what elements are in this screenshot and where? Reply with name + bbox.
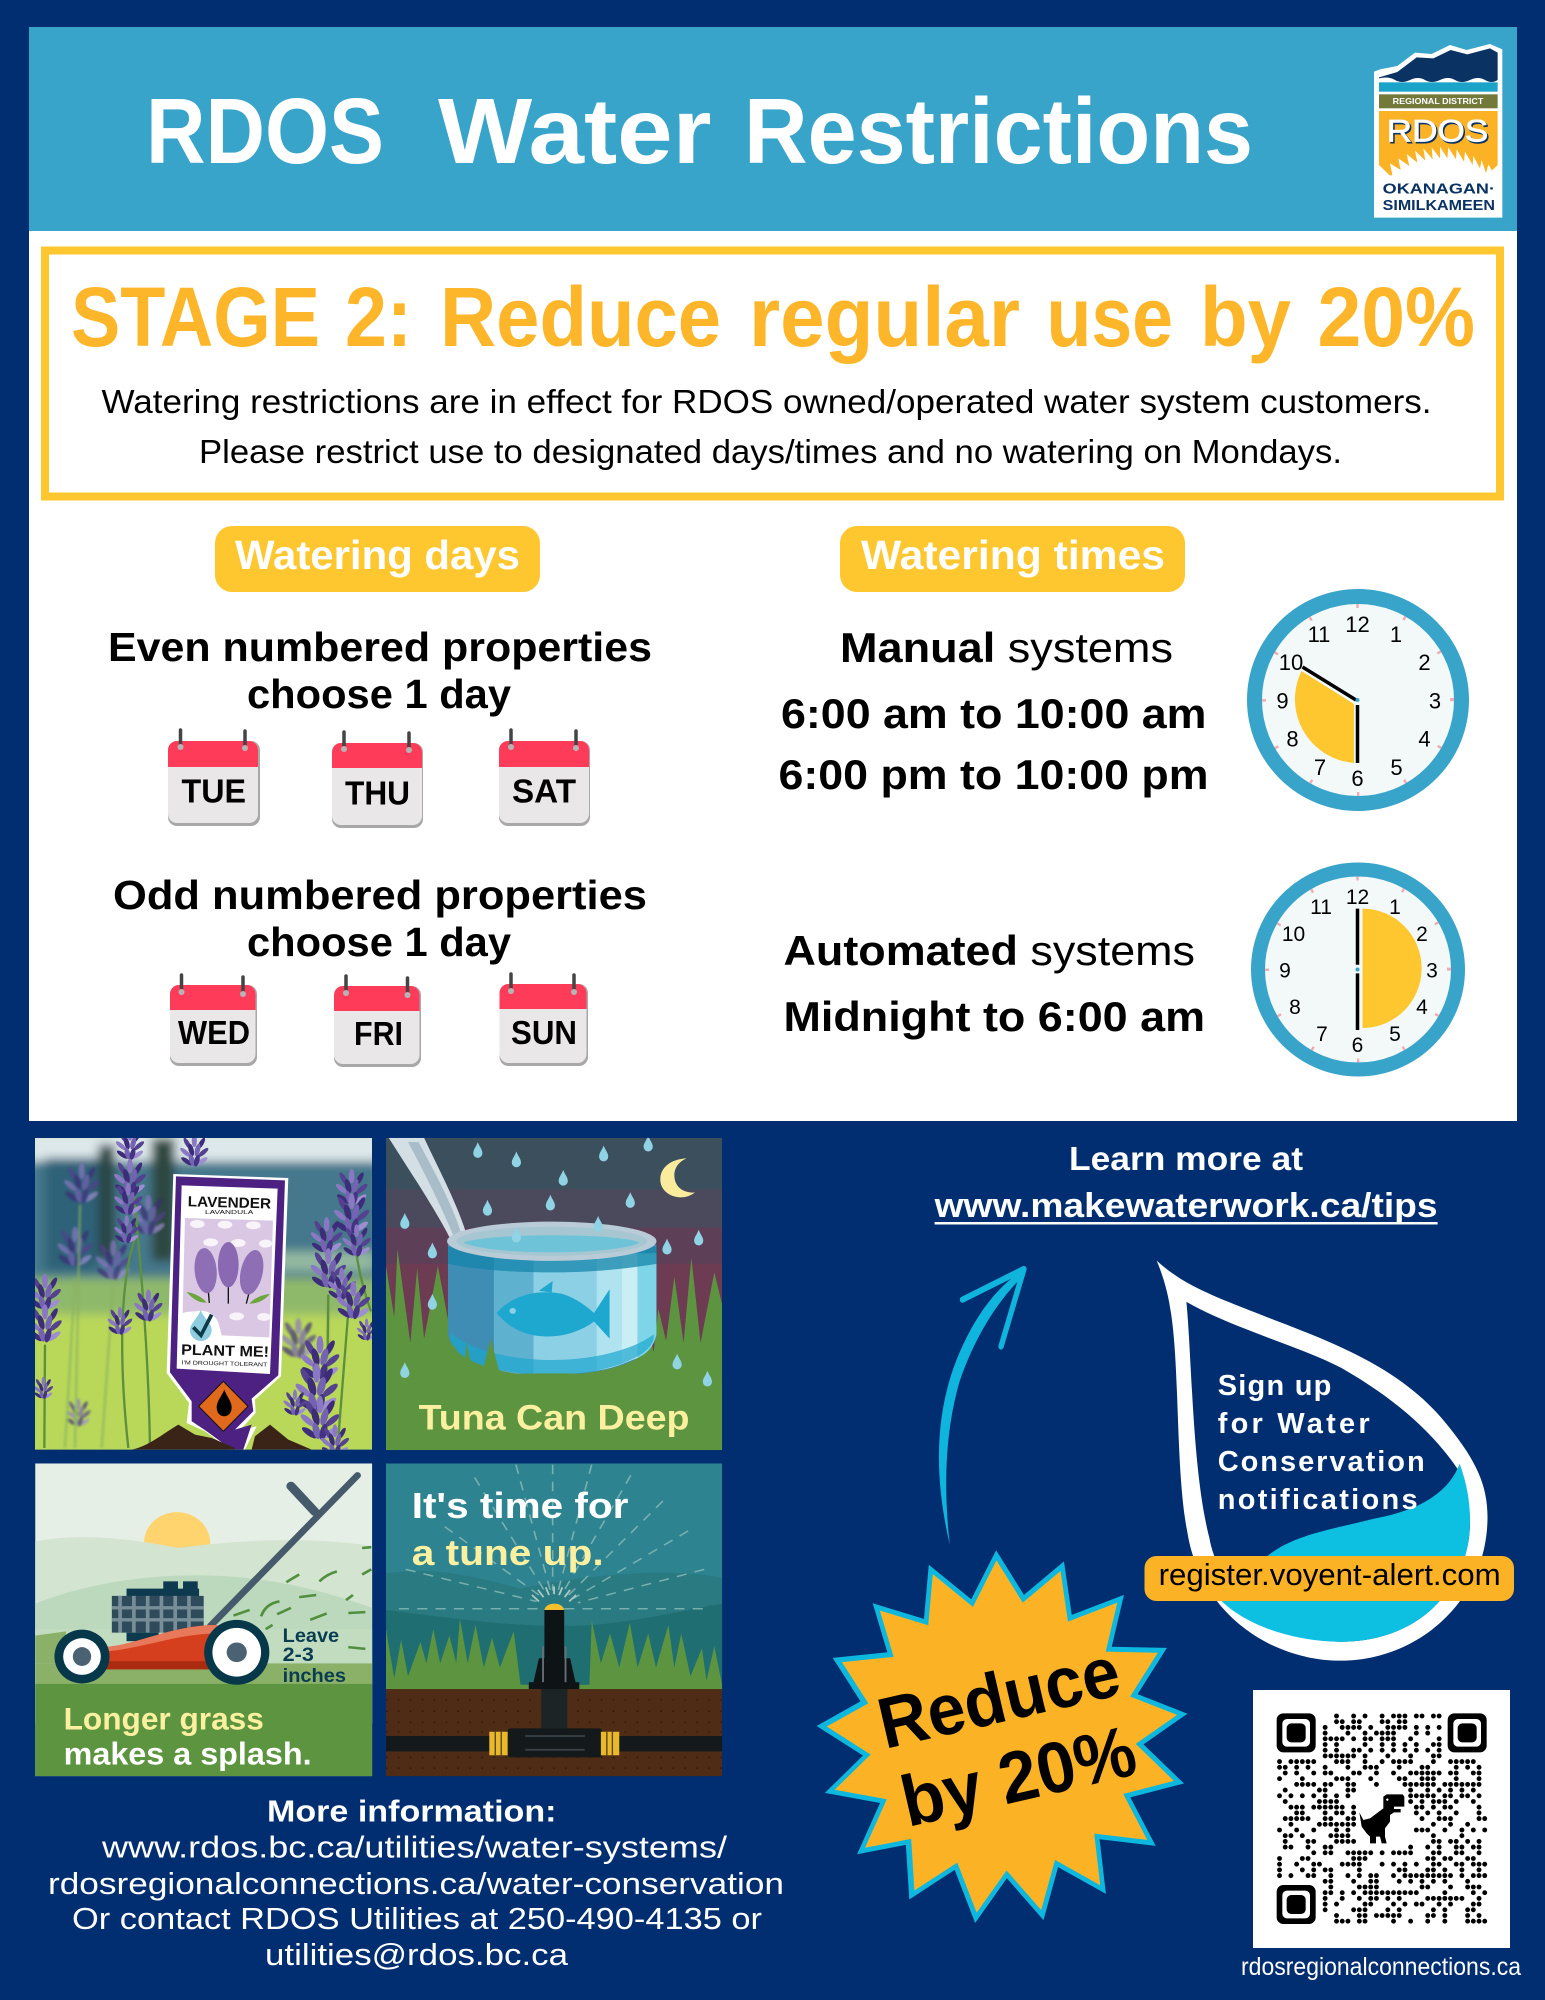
- even numbered properties text: choose 1 day: [247, 671, 511, 717]
- caption: It's time for: [412, 1485, 628, 1526]
- text block: more information: [48, 1794, 784, 1972]
- even numbered properties text: [108, 624, 652, 717]
- icon: clock manual: 1: [1390, 622, 1402, 647]
- icon: clock automated: 2: [1416, 923, 1428, 946]
- heading: stage 2: STAGE: [71, 270, 320, 364]
- pipe: [386, 1736, 722, 1751]
- caption: makes a splash.: [64, 1736, 312, 1771]
- soil: [386, 1689, 722, 1776]
- soil mounds: [132, 1425, 312, 1450]
- icon: clock automated: 8: [1289, 996, 1301, 1019]
- icon: clock automated: 7: [1316, 1023, 1328, 1046]
- icon: clock manual: 9: [1276, 688, 1289, 714]
- icon: clock automated: [1258, 870, 1458, 1070]
- lid: [389, 1138, 468, 1245]
- icon: clock manual: 7: [1314, 755, 1326, 780]
- automated systems times: Automated systems: [784, 927, 1195, 974]
- lavender flowers: [27, 1128, 377, 1457]
- fish: [497, 1281, 610, 1339]
- icon: clock automated: 6: [1352, 1034, 1363, 1057]
- manual systems times: [778, 624, 1208, 798]
- clock wedge: [1295, 671, 1354, 763]
- text block: more information: More information:: [267, 1794, 556, 1829]
- QR caption: rdosregionalconnections.ca: [1241, 1953, 1521, 1981]
- icon: calendar SAT: [499, 730, 590, 826]
- manual systems times: 6:00 am to 10:00 am: [781, 690, 1206, 737]
- logo: RDOS Okanagan-Similkameen: [1374, 44, 1502, 218]
- panel: watering times: [778, 526, 1462, 1070]
- heading: stage 2: Reduce: [440, 270, 721, 364]
- icon: clock automated: 12: [1346, 886, 1369, 909]
- plant tag: I'M DROUGHT TOLERANT: [182, 1360, 268, 1369]
- icon: calendar TUE: TUE: [182, 773, 246, 810]
- plant tag: PLANT ME!: [181, 1342, 269, 1361]
- sign up text: [1218, 1370, 1425, 1516]
- notice line 2: Please restrict use to designated days/times and no watering on Mondays.: [199, 433, 1342, 470]
- notice line 1: Watering restrictions are in effect for RDOS owned/operated water system customers.: [102, 383, 1432, 420]
- odd numbered properties text: choose 1 day: [247, 919, 511, 965]
- icon: calendar SUN: SUN: [511, 1014, 577, 1051]
- text block: more information: Or contact RDOS Utilities at 250-490-4135 or: [72, 1901, 762, 1936]
- sign up text: for Water: [1218, 1408, 1370, 1440]
- icon: clock manual: 8: [1286, 726, 1299, 752]
- icon: calendar THU: [332, 732, 423, 828]
- icon: clock manual: 10: [1279, 650, 1303, 675]
- wheels: [54, 1620, 269, 1685]
- text block: more information: utilities@rdos.bc.ca: [265, 1937, 569, 1972]
- grass clippings: [234, 1547, 371, 1649]
- icon: calendar FRI: FRI: [354, 1015, 403, 1052]
- image: sprinkler tune up: [386, 1463, 722, 1776]
- grass: [386, 1619, 722, 1691]
- starburst text: by 20%: [894, 1711, 1143, 1843]
- even numbered properties text: Even numbered properties: [108, 624, 652, 670]
- arrow: [939, 1269, 1024, 1545]
- sprinkler: [489, 1604, 619, 1757]
- icon: calendar SAT: SAT: [512, 773, 576, 810]
- image: lavender plant tag photo: [27, 1128, 382, 1457]
- caption: [66, 1708, 310, 1771]
- text block: learn more link: Learn more at: [1069, 1140, 1303, 1177]
- heading: stage 2: [71, 270, 1475, 364]
- icon: clock manual: 12: [1345, 612, 1370, 637]
- icon: calendar SUN: [500, 974, 588, 1066]
- QR code: [1253, 1690, 1510, 1948]
- icon: clock manual: 3: [1429, 688, 1441, 714]
- icon: clock manual: 4: [1418, 726, 1431, 752]
- plant tag: [167, 1174, 288, 1450]
- logo: RDOS Okanagan-Similkameen: RDOS: [1387, 113, 1488, 149]
- water drops: [400, 1136, 712, 1387]
- caption: Longer grass: [64, 1701, 264, 1736]
- image: longer grass mower: [35, 1463, 372, 1776]
- text block: more information: www.rdos.bc.ca/utilities/water-systems/: [101, 1830, 727, 1865]
- heading: stage 2: 2:: [345, 270, 412, 364]
- logo: RDOS Okanagan-Similkameen: RDOS: [1388, 114, 1490, 150]
- tuna can: [447, 1222, 656, 1375]
- leave 2-3 inches: Leave: [283, 1626, 339, 1647]
- icon: clock automated: 11: [1310, 896, 1332, 919]
- leave 2-3 inches: 2-3: [283, 1645, 314, 1666]
- title: [146, 79, 1253, 183]
- icon: clock automated: 3: [1426, 960, 1438, 982]
- icon: clock automated: 1: [1389, 896, 1401, 919]
- plant tag: LAVANDULA: [205, 1210, 254, 1216]
- panel: watering days: [108, 526, 652, 1067]
- grass: [386, 1249, 722, 1382]
- pill: watering days: [215, 526, 540, 592]
- text block: learn more link: [934, 1140, 1438, 1225]
- icon: clock manual: 5: [1390, 755, 1403, 780]
- clock wedge: [1362, 909, 1422, 1028]
- sign up text: notifications: [1218, 1484, 1418, 1516]
- title: RDOS: [146, 79, 384, 183]
- panel: header banner: [29, 27, 1517, 231]
- caption: a tune up.: [412, 1532, 604, 1573]
- pill: watering days: Watering days: [235, 532, 520, 578]
- mower body: [105, 1625, 227, 1669]
- manual systems times: Manual systems: [840, 624, 1173, 671]
- odd numbered properties text: [113, 872, 647, 965]
- title: Water: [438, 79, 712, 183]
- manual systems times: 6:00 pm to 10:00 pm: [778, 751, 1208, 798]
- logo: RDOS Okanagan-Similkameen: OKANAGAN·: [1383, 181, 1495, 197]
- icon: clock manual: 11: [1308, 622, 1330, 647]
- register pill: register.voyent-alert.com: [1159, 1557, 1501, 1592]
- icon: clock automated: 5: [1389, 1023, 1401, 1046]
- icon: clock manual: 2: [1418, 650, 1431, 675]
- automated systems times: [784, 927, 1205, 1040]
- automated systems times: Midnight to 6:00 am: [784, 993, 1205, 1040]
- pill: watering times: [840, 526, 1185, 592]
- odd numbered properties text: Odd numbered properties: [113, 872, 647, 918]
- mower handle: [211, 1475, 358, 1626]
- starburst: reduce by 20%: [817, 1550, 1187, 1923]
- logo: RDOS Okanagan-Similkameen: REGIONAL DISTRICT: [1393, 97, 1483, 106]
- icon: calendar THU: THU: [345, 775, 410, 812]
- icon: calendar TUE: [168, 730, 260, 826]
- pill: watering times: Watering times: [861, 532, 1165, 578]
- icon: clock manual: 6: [1351, 766, 1364, 791]
- panel: white content area: [29, 231, 1517, 1121]
- icon: calendar WED: WED: [178, 1014, 250, 1051]
- text block: more information: rdosregionalconnections.ca/water-conservation: [48, 1866, 784, 1901]
- leave 2-3 inches: [283, 1628, 346, 1682]
- image: tuna can deep: [386, 1136, 722, 1450]
- heading: stage 2: 20%: [1318, 270, 1475, 364]
- heading: stage 2: regular: [749, 270, 1020, 364]
- icon: calendar WED: [170, 975, 257, 1066]
- heading: stage 2: use: [1046, 270, 1173, 364]
- sign up text: Sign up: [1218, 1370, 1331, 1402]
- starburst text: Reduce: [871, 1632, 1127, 1765]
- icon: clock automated: 4: [1416, 996, 1428, 1019]
- spray: [399, 1465, 711, 1609]
- starburst text: [871, 1632, 1143, 1843]
- water drop sign up: [1144, 1261, 1514, 1661]
- leave 2-3 inches: inches: [283, 1665, 346, 1687]
- icon: calendar FRI: [334, 976, 421, 1067]
- moon: [660, 1158, 695, 1197]
- sign up text: Conservation: [1218, 1446, 1425, 1478]
- engine: [112, 1581, 204, 1633]
- text block: learn more link: www.makewaterwork.ca/tips: [934, 1187, 1438, 1225]
- heading: stage 2: by: [1200, 270, 1291, 364]
- panel: stage 2 notice: [45, 250, 1500, 496]
- title: Restrictions: [744, 79, 1253, 183]
- blurred background flowers: [56, 1163, 328, 1448]
- caption: [412, 1485, 628, 1573]
- icon: clock automated: 10: [1282, 923, 1305, 946]
- icon: clock automated: 9: [1279, 960, 1291, 982]
- icon: clock manual: [1254, 596, 1462, 804]
- plant tag: LAVENDER: [188, 1194, 272, 1213]
- caption: Tuna Can Deep: [419, 1398, 690, 1437]
- logo: RDOS Okanagan-Similkameen: SIMILKAMEEN: [1383, 198, 1495, 214]
- lavender stems: [44, 1155, 371, 1448]
